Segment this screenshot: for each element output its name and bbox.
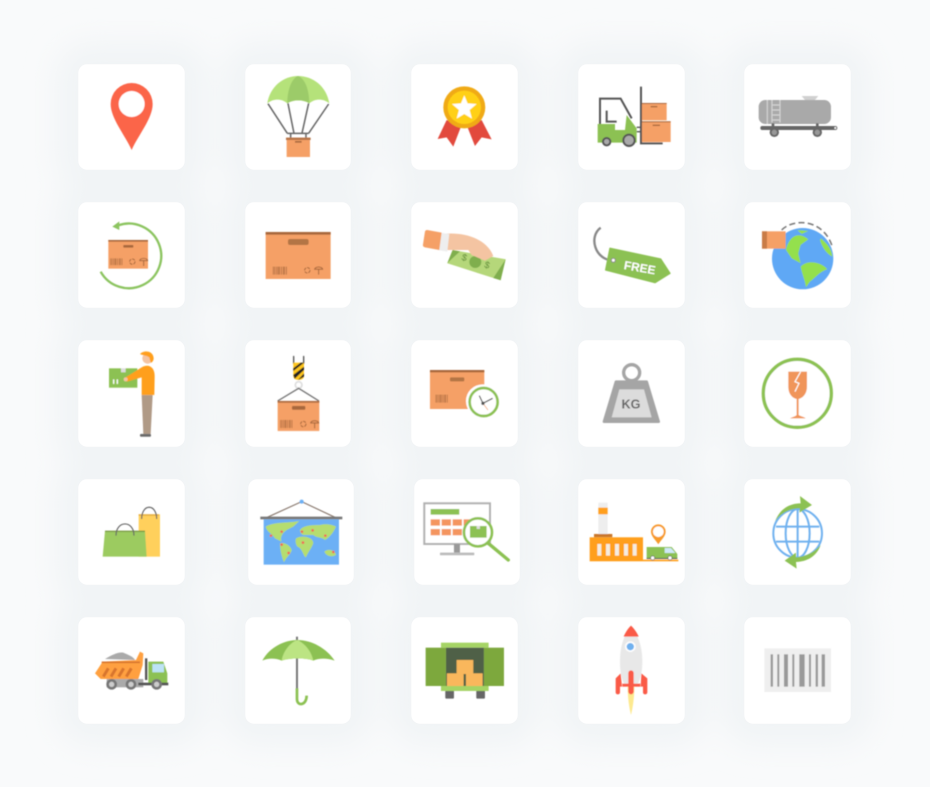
icon: shopping bags (103, 507, 160, 557)
icon: rail tank wagon (759, 96, 837, 137)
icon: free price tag (594, 228, 670, 283)
icon: fragile glass (763, 359, 831, 427)
icon: hand paying money (423, 230, 506, 280)
icon: kg weight: KG (622, 398, 641, 412)
icon: box return arrow (101, 221, 161, 288)
icon: globe with arrows (773, 496, 822, 569)
icon: cardboard box (266, 232, 331, 279)
icon: factory and delivery van (590, 503, 678, 561)
icon: umbrella (262, 637, 335, 704)
icon: location pin (111, 83, 153, 150)
icon: parachute with box (267, 76, 329, 157)
icon: kg weight (604, 365, 659, 422)
icon: rocket (616, 626, 647, 715)
white cards grid (78, 64, 851, 724)
icon: box with clock (430, 370, 499, 418)
icon: monitor tracking search (424, 503, 508, 560)
icon: forklift (598, 87, 671, 147)
icon: hand paying money: $ (460, 252, 469, 263)
icon: free price tag: FREE (623, 258, 657, 277)
icon: barcode (764, 648, 831, 692)
icon: hanging world map (260, 500, 342, 565)
icon: dump truck (95, 652, 168, 690)
icon: delivery worker holding box (109, 351, 155, 437)
icon: shipping around globe (762, 223, 833, 289)
icon: hand paying money: $ (483, 260, 492, 271)
icon: award medal (438, 86, 492, 147)
icon: open truck with boxes (426, 643, 504, 699)
card halos (56, 42, 873, 746)
icon: crane hook lifting box (278, 356, 319, 431)
